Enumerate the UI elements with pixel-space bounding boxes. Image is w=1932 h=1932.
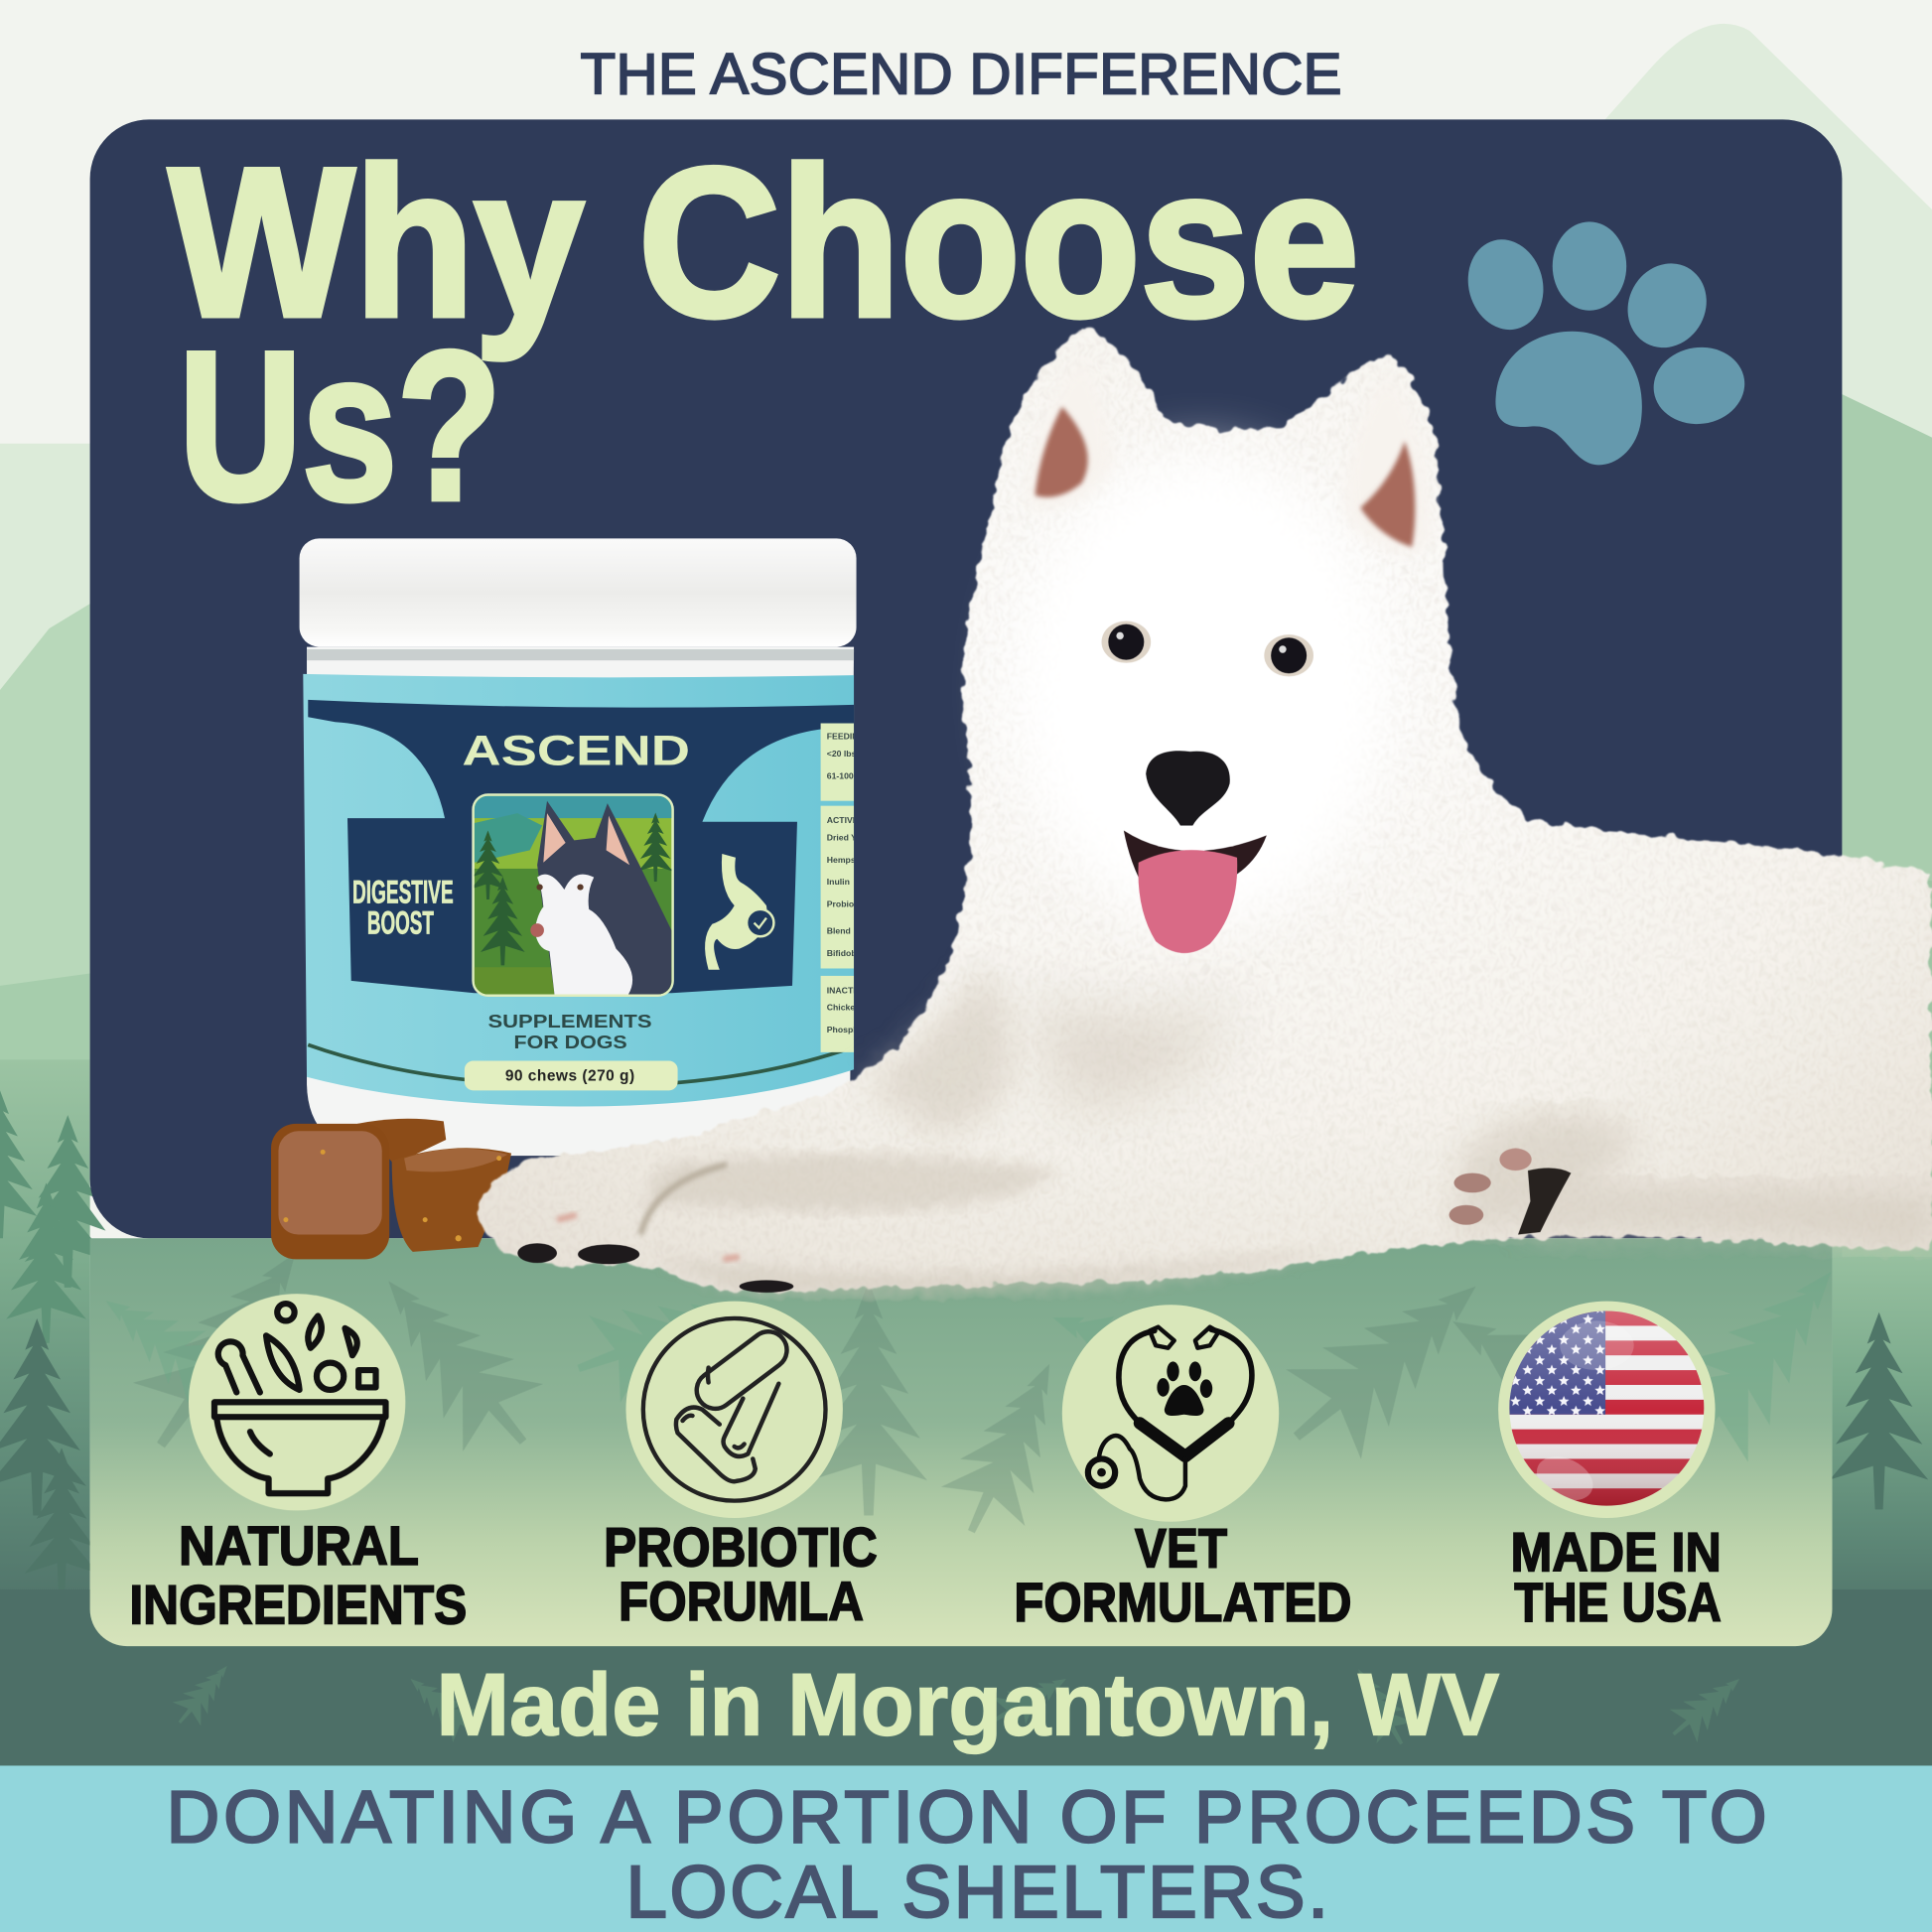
- side panel of label: INACTIVE: [827, 985, 867, 995]
- heading: why choose us: [169, 125, 1359, 545]
- side panel of label: [820, 723, 854, 1052]
- supplements text: FOR DOGS: [514, 1032, 627, 1052]
- ears: [1026, 357, 1431, 553]
- jar lid: [300, 538, 857, 647]
- side panel of label: Blend: [827, 926, 851, 936]
- benefit: natural ingredients: [129, 1294, 467, 1636]
- label: MADE IN: [1511, 1520, 1722, 1583]
- jar label: [303, 674, 874, 1106]
- panel: benefits strip: [84, 1220, 1875, 1646]
- back paw pads: [1449, 1149, 1571, 1235]
- side panel of label: Bifidobact: [827, 948, 869, 958]
- front paws: [517, 1165, 793, 1293]
- panel: navy hero: [90, 119, 1842, 1238]
- label: VET: [1135, 1517, 1227, 1580]
- icon: capsules: [625, 1302, 843, 1518]
- brand name: ASCEND: [462, 728, 690, 774]
- side panel of label: Inulin: [827, 877, 850, 887]
- jar body: [307, 647, 854, 1156]
- face highlight: [1017, 456, 1386, 924]
- label: [129, 1514, 467, 1636]
- side panel of label: 61-100 lbs: [827, 770, 869, 780]
- benefit: made in the usa: [1498, 1302, 1722, 1633]
- bottom forest band: [0, 1589, 1932, 1774]
- eyes: [1102, 621, 1313, 676]
- digestive boost text: DIGESTIVE: [352, 875, 454, 910]
- label: INGREDIENTS: [129, 1574, 467, 1636]
- husky illustration: [471, 793, 674, 997]
- leg and belly shading: [640, 961, 1932, 1295]
- fur texture: [479, 327, 1932, 1292]
- label: FORUMLA: [619, 1570, 864, 1632]
- nose: [1146, 751, 1230, 826]
- side panel of label: Probiotic: [827, 898, 865, 908]
- dog photo: white puppy: [479, 327, 1932, 1295]
- product jar: [300, 538, 874, 1156]
- side panel of label: FEEDING: [827, 732, 866, 742]
- digestive boost text: BOOST: [367, 905, 434, 941]
- title: the ascend difference: THE ASCEND DIFFERENCE: [581, 42, 1342, 106]
- icon: bowl: [189, 1294, 405, 1511]
- jar label: 90 chews (270 g): [505, 1067, 634, 1084]
- supplements text: SUPPLEMENTS: [487, 1011, 652, 1032]
- band: donation message: DONATING A PORTION OF PROCEEDS TO: [167, 1775, 1767, 1858]
- label: [1014, 1517, 1351, 1633]
- side panel of label: Chicken: [827, 1003, 861, 1013]
- band: donation message: [0, 1765, 1932, 1932]
- benefit: vet formulated: [1014, 1305, 1351, 1633]
- heading: why choose us: Why Choose: [169, 125, 1359, 361]
- side panel of label: Hempseed: [827, 855, 871, 865]
- chew count pill: [465, 1061, 678, 1090]
- icon: flag: [1498, 1302, 1716, 1518]
- dog body: [479, 327, 1932, 1292]
- digestive boost text: [352, 875, 454, 941]
- label: PROBIOTIC: [604, 1515, 878, 1578]
- icon: stomach: [705, 854, 773, 970]
- label: [604, 1515, 878, 1632]
- supplements text: [487, 1011, 652, 1052]
- location line: Made in Morgantown, WV: [436, 1654, 1499, 1753]
- benefit: probiotic formula: [604, 1302, 878, 1632]
- icon: paw print: [1458, 221, 1749, 465]
- treats: chews: [271, 1119, 511, 1259]
- side panel of label: <20 lbs: [827, 749, 857, 759]
- side panel of label: ACTIVE: [827, 815, 859, 825]
- heading: why choose us: Us?: [179, 309, 501, 545]
- band: donation message: LOCAL SHELTERS.: [625, 1851, 1328, 1932]
- side panel of label: Phosphate: [827, 1025, 871, 1035]
- side panel of label: Dried Yeast: [827, 832, 874, 842]
- mouth and tongue: [1124, 830, 1267, 953]
- label: NATURAL: [179, 1514, 419, 1577]
- label: [1511, 1520, 1722, 1633]
- icon: stethoscope with paw: [1062, 1305, 1279, 1522]
- label: THE USA: [1514, 1571, 1722, 1633]
- label: FORMULATED: [1014, 1571, 1351, 1633]
